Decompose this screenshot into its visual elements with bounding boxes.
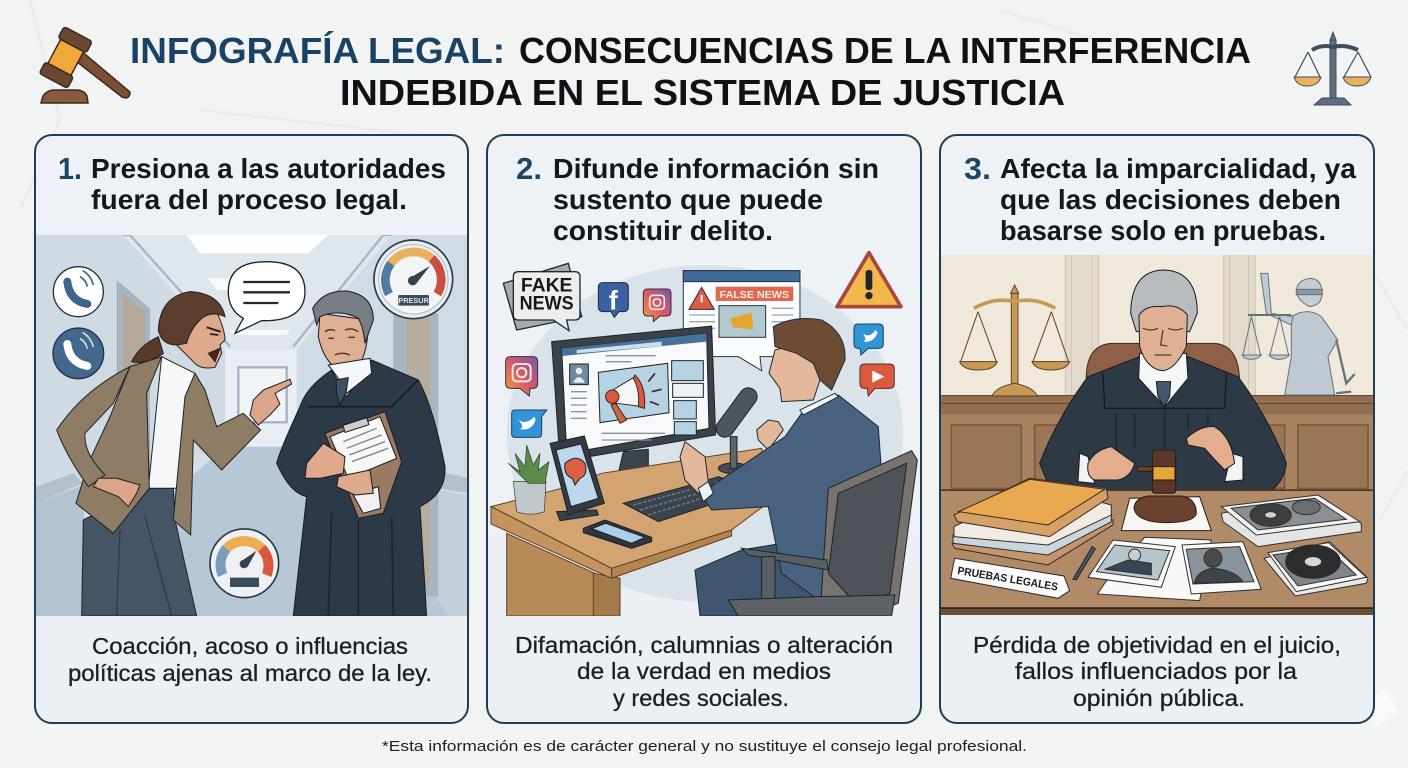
- golden scales: [960, 285, 1070, 396]
- name plate: PRUEBAS LEGALES: [957, 565, 1059, 594]
- megaphone: [606, 373, 662, 423]
- caption 3: opinión pública.: [1073, 685, 1245, 711]
- heading 2: Difunde información sin: [553, 153, 879, 184]
- footnote: *Esta información es de carácter general y no sustituye el consejo legal profesional.: [382, 738, 1027, 755]
- woman: [57, 292, 292, 616]
- icon: scales: [1294, 32, 1371, 105]
- icon: phone white: [53, 267, 103, 317]
- caption 2: [515, 632, 893, 711]
- speech bubble: [228, 262, 305, 333]
- caption 1: [68, 633, 432, 686]
- icon: twitter right: [854, 324, 883, 355]
- heading 2: constituir delito.: [553, 215, 773, 246]
- false news window: [683, 271, 800, 371]
- illustration: courtroom scene: [941, 255, 1374, 615]
- caption 3: [973, 632, 1341, 711]
- icon: pressure gauge top: PRESUR: [398, 296, 430, 305]
- name plate: [951, 558, 1070, 598]
- phone on desk: [583, 520, 652, 548]
- icon: instagram top: [643, 289, 671, 322]
- icon: instagram left: [506, 357, 538, 396]
- gavel: [1121, 450, 1211, 531]
- fake news bubble: [503, 263, 582, 331]
- icon: gavel: [39, 27, 130, 103]
- heading 2: [516, 151, 879, 246]
- caption 2: y redes sociales.: [613, 685, 789, 711]
- tablet: [550, 436, 604, 521]
- heading 1: Presiona a las autoridades: [91, 153, 446, 184]
- desk: [491, 448, 772, 616]
- heading 1: [58, 151, 446, 215]
- keyboard: [622, 476, 723, 522]
- chair: [728, 451, 917, 620]
- illustration: pressure scene: [36, 235, 469, 616]
- false news window: FALSE NEWS: [720, 290, 789, 301]
- caption 1: políticas ajenas al marco de la ley.: [68, 660, 432, 686]
- monitor: [551, 326, 716, 470]
- caption 2: de la verdad en medios: [577, 658, 831, 684]
- caption 2: Difamación, calumnias o alteración: [515, 632, 893, 658]
- icon: twitter left: [512, 410, 547, 437]
- pen: [1073, 547, 1095, 580]
- icon: phone blue: [53, 328, 104, 379]
- icon: warning triangle: [837, 253, 901, 307]
- heading 1: fuera del proceso legal.: [91, 184, 407, 215]
- title: [130, 30, 1251, 113]
- man: [680, 318, 882, 616]
- fake news bubble: NEWS: [520, 293, 574, 314]
- illustration: fake news scene: [491, 253, 917, 620]
- icon: video: [860, 364, 894, 396]
- heading 3: Afecta la imparcialidad, ya: [1000, 153, 1356, 184]
- records: [1221, 495, 1368, 596]
- heading 2: sustento que puede: [553, 184, 823, 215]
- heading 1: 1.: [58, 151, 82, 186]
- heading 3: 3.: [964, 151, 991, 186]
- icon: facebook: [598, 283, 628, 317]
- plant: [508, 445, 549, 514]
- papers and photos: [1088, 537, 1261, 601]
- caption 3: fallos influenciados por la: [1015, 658, 1297, 684]
- title: CONSECUENCIAS DE LA INTERFERENCIA: [519, 30, 1251, 71]
- heading 3: que las decisiones deben: [1000, 184, 1341, 215]
- icon: pressure gauge top: [374, 240, 453, 319]
- heading 3: [964, 151, 1356, 246]
- desk: [941, 489, 1374, 615]
- heading 3: basarse solo en pruebas.: [1000, 215, 1326, 246]
- folders: [952, 478, 1113, 565]
- icon: facebook: f: [609, 285, 618, 315]
- icon: pressure gauge bottom: [210, 529, 279, 598]
- panel: 3: [940, 135, 1374, 723]
- lady justice statue: [1242, 273, 1355, 395]
- chair: [1086, 343, 1240, 383]
- caption 1: Coacción, acoso o influencias: [92, 633, 408, 659]
- title: INFOGRAFÍA LEGAL:: [130, 30, 505, 71]
- caption 3: Pérdida de objetividad en el juicio,: [973, 632, 1341, 658]
- fake news bubble: FAKE: [521, 276, 573, 297]
- judge: [1040, 270, 1286, 495]
- panel: 2: [487, 135, 921, 723]
- microphone: [718, 397, 748, 474]
- judge: [277, 291, 445, 616]
- title: INDEBIDA EN EL SISTEMA DE JUSTICIA: [340, 72, 1065, 113]
- heading 2: 2.: [516, 151, 542, 186]
- panel: 1: [35, 135, 469, 723]
